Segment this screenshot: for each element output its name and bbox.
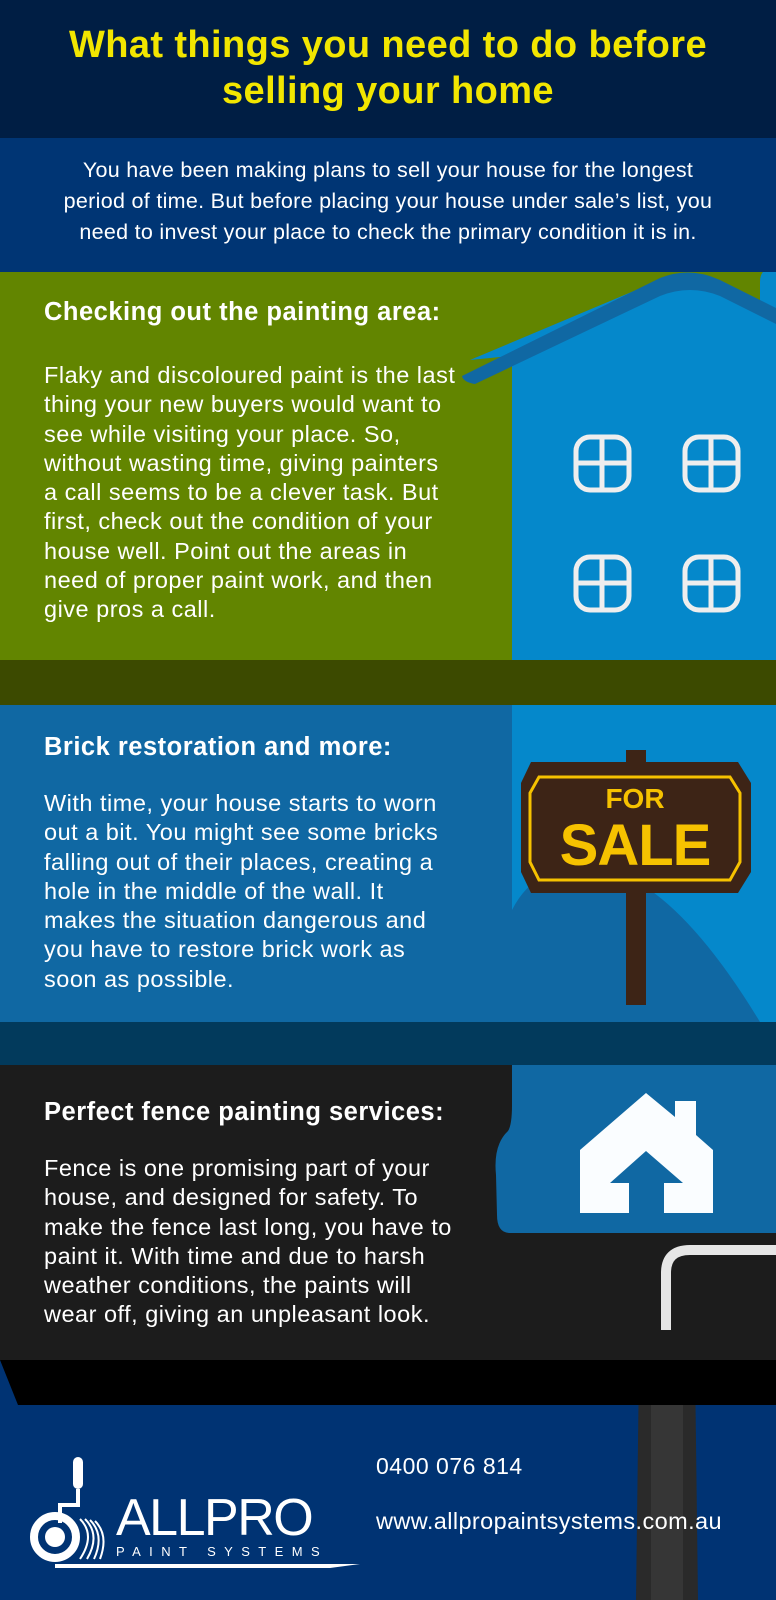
header band bbox=[0, 0, 776, 138]
text: brick restoration: you have to restore brick work as bbox=[44, 936, 405, 962]
heading: painting area: Checking out the painting area: bbox=[44, 298, 441, 326]
text: painting area: see while visiting your place. So, bbox=[44, 421, 401, 447]
text: painting area: a call seems to be a clever task. But bbox=[44, 479, 439, 505]
title bbox=[69, 24, 707, 112]
text: fence painting: make the fence last long, you have to bbox=[44, 1214, 452, 1240]
text: painting area: without wasting time, giving painters bbox=[44, 450, 439, 476]
text: fence painting: paint it. With time and due to harsh bbox=[44, 1243, 425, 1269]
footer logo: ALLPRO bbox=[116, 1489, 312, 1547]
contact: website: www.allpropaintsystems.com.au bbox=[376, 1508, 722, 1534]
black band bbox=[0, 1360, 776, 1405]
text: fence painting bbox=[44, 1155, 452, 1327]
heading: fence painting: Perfect fence painting services: bbox=[44, 1098, 444, 1126]
intro text bbox=[64, 158, 712, 244]
text: fence painting: wear off, giving an unpleasant look. bbox=[44, 1301, 430, 1327]
roller handle bbox=[636, 1405, 698, 1600]
heading: brick restoration: Brick restoration and more: bbox=[44, 733, 392, 761]
intro text: period of time. But before placing your house under sale’s list, you bbox=[64, 189, 712, 213]
text: brick restoration bbox=[44, 790, 438, 992]
text: brick restoration: With time, your house starts to worn bbox=[44, 790, 437, 816]
illustration: for sale sign bbox=[0, 705, 776, 1065]
text: painting area: first, check out the condition of your bbox=[44, 508, 433, 534]
text: painting area: give pros a call. bbox=[44, 596, 216, 622]
illustration: for sale sign: SALE bbox=[560, 813, 710, 878]
text: fence painting: weather conditions, the paints will bbox=[44, 1272, 412, 1298]
panel: fence painting bbox=[0, 1065, 776, 1360]
text: brick restoration: hole in the middle of the wall. It bbox=[44, 878, 384, 904]
text: brick restoration: out a bit. You might see some bricks bbox=[44, 819, 438, 845]
intro text: need to invest your place to check the primary condition it is in. bbox=[79, 220, 697, 244]
text: painting area: thing your new buyers would want to bbox=[44, 391, 442, 417]
text: painting area: house well. Point out the areas in bbox=[44, 538, 407, 564]
illustration: house icon and roller bbox=[496, 1065, 776, 1330]
intro text: You have been making plans to sell your house for the longest bbox=[83, 158, 693, 182]
footer logo: PAINT SYSTEMS bbox=[116, 1544, 328, 1559]
text: brick restoration: soon as possible. bbox=[44, 966, 234, 992]
illustration: for sale sign: FOR bbox=[605, 783, 665, 814]
intro band bbox=[0, 138, 776, 272]
footer logo bbox=[30, 1457, 360, 1568]
panel: painting area bbox=[0, 272, 776, 705]
illustration: blue house bbox=[0, 272, 776, 705]
text: painting area bbox=[44, 362, 455, 622]
panel: brick restoration bbox=[0, 705, 776, 1065]
text: fence painting: Fence is one promising part of your bbox=[44, 1155, 430, 1181]
text: brick restoration: makes the situation dangerous and bbox=[44, 907, 426, 933]
text: fence painting: house, and designed for safety. To bbox=[44, 1184, 418, 1210]
text: brick restoration: falling out of their places, creating a bbox=[44, 849, 433, 875]
title: What things you need to do before bbox=[69, 24, 707, 66]
title: selling your home bbox=[222, 70, 554, 112]
text: painting area: need of proper paint work, and then bbox=[44, 567, 433, 593]
text: painting area: Flaky and discoloured paint is the last bbox=[44, 362, 455, 388]
contact: phone: 0400 076 814 bbox=[376, 1453, 523, 1479]
